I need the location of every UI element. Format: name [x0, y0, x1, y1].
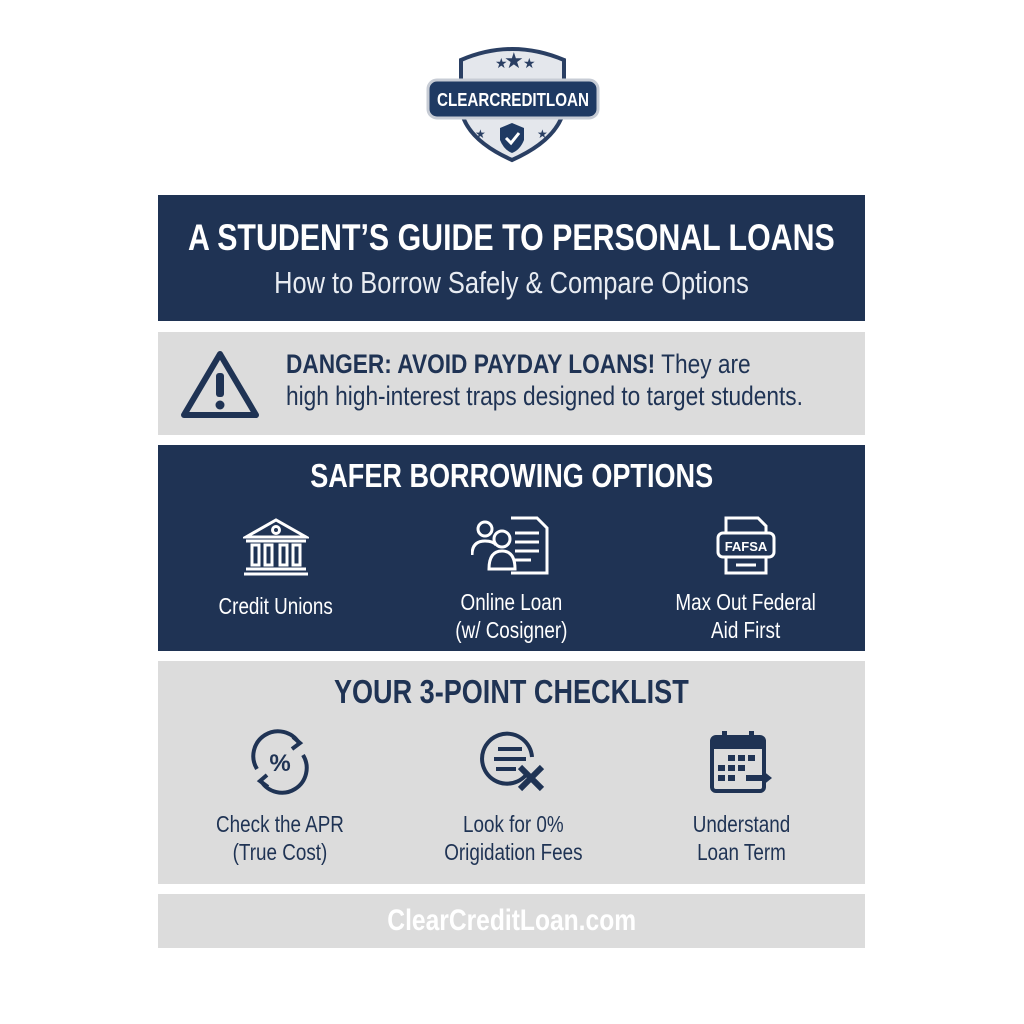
item: APR: (True Cost)	[233, 839, 327, 865]
option: credit unions: Credit Unions	[219, 593, 333, 619]
footer url	[158, 894, 865, 948]
icon: warning triangle	[181, 351, 259, 418]
item: APR: %	[269, 750, 291, 777]
option: FAFSA: Max Out Federal	[676, 589, 816, 615]
option: online loan: Online Loan	[460, 589, 562, 615]
logo badge: ★	[495, 55, 508, 71]
option: FAFSA: Aid First	[711, 617, 781, 643]
title: A STUDENT’S GUIDE TO PERSONAL LOANS	[188, 217, 835, 258]
panel: safer borrowing options	[158, 445, 865, 651]
logo badge: ★	[523, 55, 536, 71]
subtitle: How to Borrow Safely & Compare Options	[274, 265, 749, 300]
option: online loan: (w/ Cosigner)	[455, 617, 567, 643]
item: origination fees: Look for 0%	[463, 811, 563, 837]
item: loan term	[692, 731, 790, 865]
option: FAFSA: FAFSA	[725, 539, 768, 554]
item: origination fees	[444, 732, 582, 865]
logo badge	[426, 47, 600, 162]
logo badge: ★	[537, 127, 548, 141]
header panel	[158, 195, 865, 321]
item: origination fees: Origidation Fees	[444, 839, 582, 865]
warning text: DANGER: AVOID PAYDAY LOANS! They are	[286, 349, 751, 379]
heading: YOUR 3-POINT CHECKLIST	[334, 673, 689, 710]
item: APR: Check the APR	[216, 811, 344, 837]
warning text: high high-interest traps designed to target students.	[286, 381, 803, 411]
option: FAFSA	[676, 516, 816, 643]
warning text	[286, 349, 803, 411]
panel: danger warning	[158, 332, 865, 435]
option: online loan	[455, 516, 567, 643]
logo badge: ★	[475, 127, 486, 141]
option: credit unions	[219, 518, 333, 619]
panel: checklist	[158, 661, 865, 884]
item: APR	[216, 729, 344, 865]
heading: SAFER BORROWING OPTIONS	[310, 457, 713, 494]
item: loan term: Understand	[692, 811, 790, 837]
footer url: ClearCreditLoan.com	[387, 904, 636, 937]
logo badge: ★	[504, 48, 524, 73]
item: loan term: Loan Term	[697, 839, 785, 865]
